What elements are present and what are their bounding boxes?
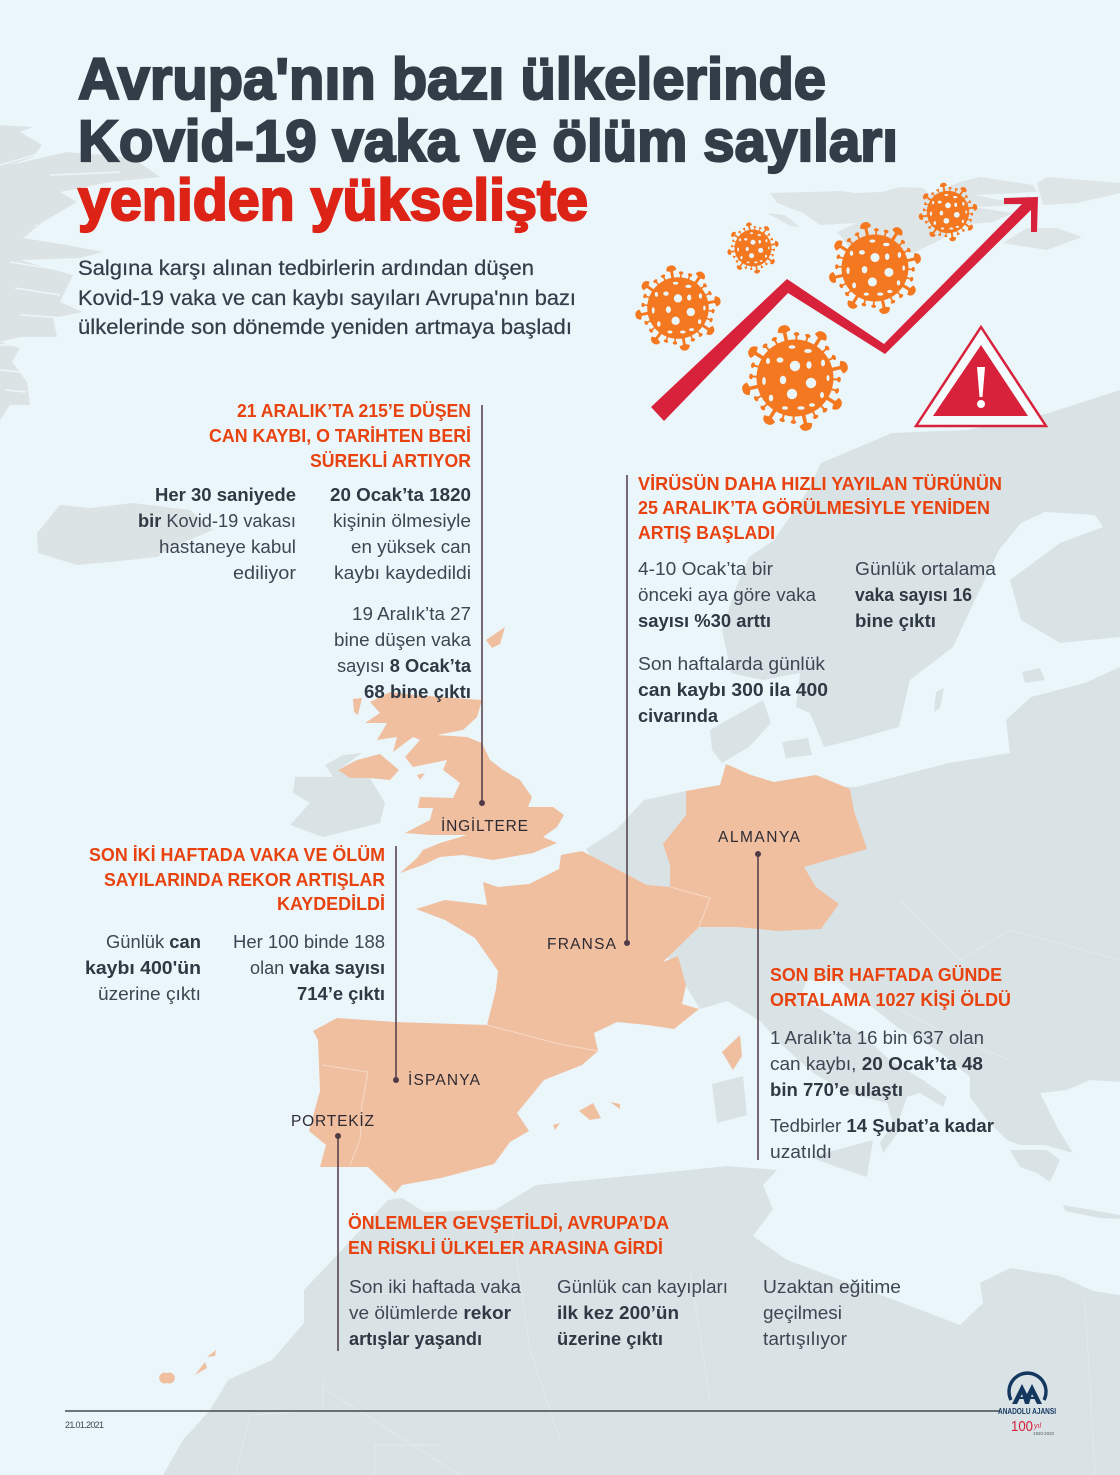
panel: France: 4-10 Ocak’ta bir [638,559,773,579]
panel: Spain: Günlük can [106,932,201,952]
land: Sicily and Sardinia [712,1076,873,1177]
subtitle: Salgına karşı alınan tedbirlerin ardından düşen [78,257,534,280]
panel: United Kingdom: hastaneye kabul [159,537,296,557]
panel: United Kingdom: 19 Aralık’ta 27 [352,604,471,624]
panel: Germany: Tedbirler 14 Şubat’a kadar [770,1116,994,1136]
islands: Balearic [553,1102,620,1130]
panel: Spain [85,845,385,1004]
panel: Portugal: ve ölümlerde rekor [349,1303,511,1323]
panel: United Kingdom: kişinin ölmesiyle [333,511,471,531]
panel: Spain: Her 100 binde 188 [233,932,385,952]
subtitle: Kovid-19 vaka ve can kaybı sayıları Avrupa'nın bazı [78,287,576,310]
panel: France: önceki aya göre vaka [638,585,817,605]
leader line: Portugal [335,1133,341,1351]
country labels: İSPANYA [408,1071,481,1089]
panel: Portugal: Son iki haftada vaka [349,1277,522,1297]
logo: Anadolu Ajansı: 100 [1011,1418,1033,1435]
icon: warning triangle [916,327,1046,426]
land: Iceland [37,503,213,565]
subtitle: ülkelerinde son dönemde yeniden artmaya başladı [78,316,572,339]
leader line: Germany [755,851,761,1160]
panel: France: Günlük ortalama [855,559,997,579]
decorative borders [322,887,710,1165]
islands: Shetland [486,627,505,648]
panel: United Kingdom: Her 30 saniyede [155,485,296,505]
panel: Portugal: üzerine çıktı [557,1329,663,1349]
country: Northern Ireland [338,754,399,780]
land: Ireland [290,753,385,837]
panel: United Kingdom [138,401,472,702]
panel: Portugal: artışlar yaşandı [349,1329,482,1349]
leader line: France [624,475,630,946]
land: North Africa [163,1166,1120,1475]
logo: Anadolu Ajansı: ANADOLU AJANSI [998,1406,1056,1416]
icon: rising trend arrow [651,197,1038,421]
panel: United Kingdom: bir Kovid-19 vakası [138,511,296,531]
panel: Portugal: ÖNLEMLER GEVŞETİLDİ, AVRUPA’DA [348,1213,669,1233]
subtitle [78,257,576,339]
panel: France: bine çıktı [855,611,936,631]
panel: Germany [770,965,1011,1162]
country labels: FRANSA [547,936,617,953]
panel: Germany: ORTALAMA 1027 KİŞİ ÖLDÜ [770,990,1011,1010]
islands: Canary [159,1350,216,1384]
panel: United Kingdom: SÜREKLİ ARTIYOR [310,451,471,471]
panel: Portugal: tartışılıyor [763,1329,847,1349]
country: Great Britain [365,692,564,873]
islands: Corsica [722,1035,742,1070]
map: highlighted countries [159,627,867,1384]
land: Arctic islands east [767,177,1120,250]
country labels: ALMANYA [718,829,801,846]
land: Greenland ice streaks [0,152,120,392]
land: Peloponnese [1010,1150,1060,1182]
panel: United Kingdom: 20 Ocak’ta 1820 [330,485,471,505]
logo: Anadolu Ajansı: yıl [1033,1423,1041,1430]
icon: viruses [628,178,982,443]
panel: United Kingdom: CAN KAYBI, O TARİHTEN BERİ [209,426,471,446]
panel: United Kingdom: 21 ARALIK’TA 215’E DÜŞEN [237,401,471,421]
panel: Spain: üzerine çıktı [98,984,201,1004]
country labels: PORTEKİZ [291,1112,374,1130]
panel: Portugal: Uzaktan eğitime [763,1277,901,1297]
panel: United Kingdom: 68 bine çıktı [364,682,471,702]
panel: Spain: SAYILARINDA REKOR ARTIŞLAR [104,870,385,890]
land: Greenland fragment [0,125,160,420]
panel: United Kingdom: bine düşen vaka [334,630,472,650]
footer rule [65,1410,1000,1412]
panel: France: can kaybı 300 ila 400 [638,680,828,700]
leader line: Spain [393,846,399,1083]
panel: France: 25 ARALIK’TA GÖRÜLMESİYLE YENİDEN [638,498,990,518]
panel: France: sayısı %30 arttı [638,611,771,631]
panel: Portugal: ilk kez 200’ün [557,1303,679,1323]
land: Arctic islands west [770,177,1037,260]
panel: Spain: olan vaka sayısı [250,958,385,978]
land: continental Europe [586,667,1120,1153]
panel: Spain: kaybı 400'ün [85,958,201,978]
islands: Hebrides [353,698,425,780]
panel: Portugal: EN RİSKLİ ÜLKELER ARASINA GİRDİ [348,1238,663,1258]
panel: Germany: can kaybı, 20 Ocak’ta 48 [770,1054,983,1074]
land: Denmark [710,700,812,763]
panel: France: ARTIŞ BAŞLADI [638,523,775,543]
panel: France [638,474,1002,726]
panel: Portugal: Günlük can kayıpları [557,1277,728,1297]
panel: France: civarında [638,706,719,726]
country: France [416,851,710,1051]
panel: Portugal: geçilmesi [763,1303,842,1323]
title: Kovid-19 vaka ve ölüm sayıları [78,109,898,174]
land: Scandinavia [722,390,1120,747]
country: Germany [663,764,867,931]
panel: France: VİRÜSÜN DAHA HIZLI YAYILAN TÜRÜNÜN [638,474,1002,494]
leader line: United Kingdom [479,405,485,806]
panel: Spain: 714’e çıktı [297,984,385,1004]
panel: Germany: bin 770’e ulaştı [770,1080,903,1100]
land: Baltic islands [934,668,1045,712]
panel: United Kingdom: en yüksek can [351,537,471,557]
panel: Spain: KAYDEDİLDİ [277,894,385,914]
country labels: İNGİLTERE [441,817,528,835]
panel: United Kingdom: sayısı 8 Ocak’ta [337,656,472,676]
land: Crete [1063,1205,1120,1219]
country labels [291,817,801,1130]
logo: Anadolu Ajansı: 1920-2020 [1033,1431,1054,1436]
panel: Germany: uzatıldı [770,1142,832,1162]
panel: Germany: SON BİR HAFTADA GÜNDE [770,965,1002,985]
title: Avrupa'nın bazı ülkelerinde [78,47,826,112]
panel: Germany: 1 Aralık’ta 16 bin 637 olan [770,1028,984,1048]
panel: United Kingdom: ediliyor [233,563,296,583]
date: 21.01.2021 [65,1420,104,1430]
logo: Anadolu Ajansı [998,1373,1056,1436]
panel: Spain: SON İKİ HAFTADA VAKA VE ÖLÜM [89,845,385,865]
title: yeniden yükselişte [78,168,588,233]
panel: France: vaka sayısı 16 [855,585,972,605]
country: Spain and Portugal [309,1018,598,1193]
panel: Portugal [348,1213,901,1349]
panel: United Kingdom: kaybı kaydedildi [334,563,471,583]
panel: France: Son haftalarda günlük [638,654,826,674]
title [78,47,898,233]
